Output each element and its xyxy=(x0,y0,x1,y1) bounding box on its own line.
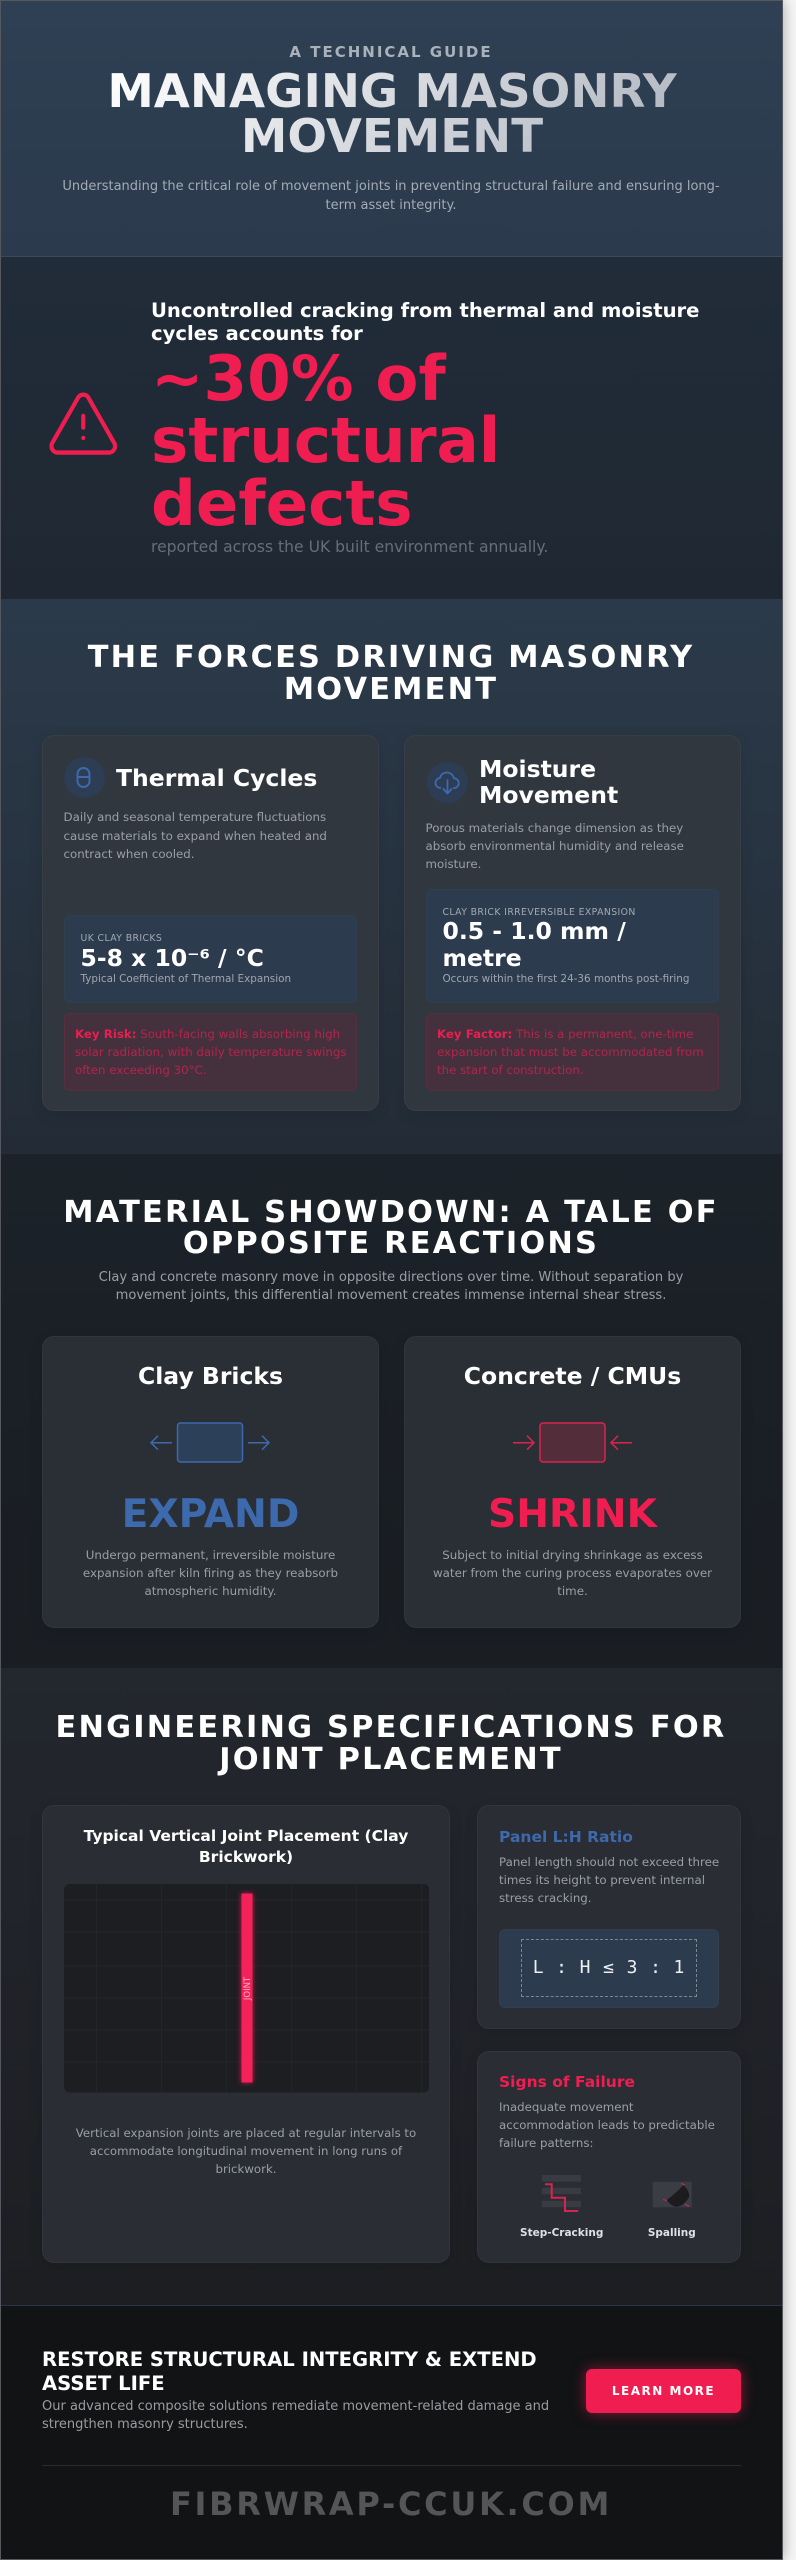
call to action title: ASSET LIFE xyxy=(42,2372,165,2395)
stat footnote: reported across the UK built environment annually. xyxy=(151,538,548,556)
description: Daily and seasonal temperature fluctuations xyxy=(64,810,326,824)
stat lead-in: Uncontrolled cracking from thermal and moisture xyxy=(151,299,699,322)
description: Subject to initial drying shrinkage as excess xyxy=(442,1548,703,1562)
description: cause materials to expand when heated and xyxy=(64,829,327,843)
call to action title: RESTORE STRUCTURAL INTEGRITY & EXTEND xyxy=(42,2348,537,2371)
stat label: CLAY BRICK IRREVERSIBLE EXPANSION xyxy=(442,906,636,918)
diagram caption: accommodate longitudinal movement in long runs of xyxy=(90,2144,402,2158)
panel: L:H ratio xyxy=(477,1805,741,2029)
description: time. xyxy=(557,1584,588,1598)
panel: moisture movement xyxy=(404,735,741,1111)
stat lead-in: cycles accounts for xyxy=(151,322,363,345)
diagram caption xyxy=(76,2126,416,2176)
heading: JOINT PLACEMENT xyxy=(219,1742,563,1776)
subtitle: Understanding the critical role of movement joints in preventing structural failure and ensuring long- xyxy=(62,179,720,194)
stat value: metre xyxy=(442,944,522,972)
panel title: Brickwork) xyxy=(199,1848,293,1866)
panel title: Concrete / CMUs xyxy=(464,1362,681,1390)
panel: concrete and CMUs xyxy=(404,1336,741,1628)
panel: clay bricks xyxy=(42,1336,379,1628)
panel title: Movement xyxy=(479,781,618,809)
heading: THE FORCES DRIVING MASONRY xyxy=(88,640,694,675)
description: times its height to prevent internal xyxy=(499,1873,705,1887)
stat value: 5-8 x 10⁻⁶ / °C xyxy=(80,944,264,972)
icon: thermometer xyxy=(64,757,105,798)
key risk text: Key Risk: South-facing walls absorbing high xyxy=(75,1026,340,1040)
stat box xyxy=(426,889,718,1002)
description: atmospheric humidity. xyxy=(144,1584,276,1598)
main title: MOVEMENT xyxy=(241,110,543,164)
panel title: Panel L:H Ratio xyxy=(499,1828,633,1846)
description xyxy=(64,810,327,861)
key risk text xyxy=(75,1026,347,1077)
description xyxy=(499,2100,715,2150)
diagram: vertical joint in brickwork xyxy=(64,1884,429,2092)
panel title: Signs of Failure xyxy=(499,2073,635,2091)
heading xyxy=(56,1710,726,1776)
description: absorb environmental humidity and release xyxy=(426,839,684,853)
panel title: Moisture xyxy=(479,755,596,783)
button: learn more: LEARN MORE xyxy=(612,2384,715,2398)
description: expansion after kiln firing as they reabsorb xyxy=(83,1566,338,1580)
panel title xyxy=(479,755,618,809)
label: step-cracking: Step-Cracking xyxy=(520,2227,603,2239)
key risk callout xyxy=(64,1013,356,1091)
subtitle xyxy=(62,179,720,213)
heading xyxy=(63,1194,719,1261)
key factor callout xyxy=(426,1013,718,1091)
panel: signs of failure xyxy=(477,2050,741,2262)
stat label: UK CLAY BRICKS xyxy=(80,933,162,944)
icon: spalling xyxy=(652,2182,692,2208)
key statistic section xyxy=(0,257,782,599)
main title: MANAGING MASONRY xyxy=(107,64,677,118)
stat note: Typical Coefficient of Thermal Expansion xyxy=(80,973,291,985)
result word: shrink: SHRINK xyxy=(488,1492,657,1537)
key factor text: Key Factor: This is a permanent, one-time xyxy=(437,1026,693,1040)
key risk text: solar radiation, with daily temperature swings xyxy=(75,1045,347,1059)
call to action text: Our advanced composite solutions remediate movement-related damage and xyxy=(42,2399,549,2414)
icon: warning triangle xyxy=(49,392,118,455)
panel title: Thermal Cycles xyxy=(116,764,317,792)
key factor text: the start of construction. xyxy=(437,1063,584,1077)
stat box xyxy=(64,915,356,1003)
description xyxy=(499,1855,719,1905)
big statistic xyxy=(151,342,500,540)
section: engineering specifications xyxy=(0,1668,782,2305)
description: water from the curing process evaporates over xyxy=(433,1566,712,1580)
stat note: Occurs within the first 24-36 months post-firing xyxy=(442,973,689,985)
section intro: movement joints, this differential movement creates immense internal shear stress. xyxy=(116,1288,666,1303)
panel title: Typical Vertical Joint Placement (Clay xyxy=(84,1827,408,1845)
ratio box xyxy=(499,1929,719,2008)
diagram caption: brickwork. xyxy=(216,2162,276,2176)
website url: FIBRWRAP-CCUK.COM xyxy=(170,2484,612,2522)
key factor text: expansion that must be accommodated from xyxy=(437,1045,704,1059)
section: material showdown xyxy=(0,1154,782,1668)
section: the forces driving masonry movement xyxy=(0,599,782,1154)
description xyxy=(83,1548,338,1598)
icon: shrinking block xyxy=(513,1422,632,1463)
description: failure patterns: xyxy=(499,2136,593,2150)
call to action text xyxy=(42,2399,549,2432)
header section xyxy=(0,0,782,257)
description: accommodation leads to predictable xyxy=(499,2118,715,2132)
description: moisture. xyxy=(426,857,481,871)
heading: ENGINEERING SPECIFICATIONS FOR xyxy=(56,1710,726,1745)
icon: step cracking xyxy=(542,2175,581,2212)
icon: expanding block xyxy=(150,1422,270,1463)
section intro xyxy=(99,1270,683,1303)
heading xyxy=(88,640,694,706)
heading: MATERIAL SHOWDOWN: A TALE OF xyxy=(63,1194,719,1230)
key risk text: often exceeding 30°C. xyxy=(75,1063,206,1077)
description: Porous materials change dimension as they xyxy=(426,821,683,835)
section intro: Clay and concrete masonry move in opposite directions over time. Without separation by xyxy=(99,1270,683,1285)
footer divider xyxy=(42,2465,741,2466)
heading: OPPOSITE REACTIONS xyxy=(183,1226,599,1261)
description: Undergo permanent, irreversible moisture xyxy=(86,1548,335,1562)
big statistic: ~30% of xyxy=(151,342,446,415)
call to action title xyxy=(42,2348,537,2395)
subtitle: term asset integrity. xyxy=(326,198,456,213)
footer call to action xyxy=(0,2305,782,2560)
panel title: Clay Bricks xyxy=(138,1362,283,1390)
stat lead-in xyxy=(151,299,699,345)
dashed panel outline with formula xyxy=(521,1939,697,1997)
description xyxy=(426,821,684,871)
diagram: vertical joint in brickwork: JOINT xyxy=(242,1976,252,2001)
description: Panel length should not exceed three xyxy=(499,1855,719,1869)
description: contract when cooled. xyxy=(64,847,195,861)
main title xyxy=(103,70,681,160)
icon: cloud with arrow xyxy=(427,762,468,803)
panel title xyxy=(84,1827,408,1866)
button: learn more xyxy=(586,2369,741,2413)
result word: expand: EXPAND xyxy=(122,1492,299,1537)
eyebrow: a technical guide: A TECHNICAL GUIDE xyxy=(289,43,493,61)
label: spalling: Spalling xyxy=(648,2227,696,2239)
big statistic: defects xyxy=(151,467,413,540)
description: Inadequate movement xyxy=(499,2100,634,2114)
heading: MOVEMENT xyxy=(284,672,498,706)
panel: joint placement diagram xyxy=(42,1805,450,2262)
stat value: 0.5 - 1.0 mm / xyxy=(442,917,626,945)
call to action text: strengthen masonry structures. xyxy=(42,2417,248,2432)
big statistic: structural xyxy=(151,404,500,477)
key factor text xyxy=(437,1026,704,1077)
panel: thermal cycles xyxy=(42,735,379,1111)
diagram caption: Vertical expansion joints are placed at regular intervals to xyxy=(76,2126,416,2140)
stat value xyxy=(442,917,626,972)
formula text: L : H ≤ 3 : 1 xyxy=(533,1957,685,1978)
description: stress cracking. xyxy=(499,1891,592,1905)
description xyxy=(433,1548,712,1598)
